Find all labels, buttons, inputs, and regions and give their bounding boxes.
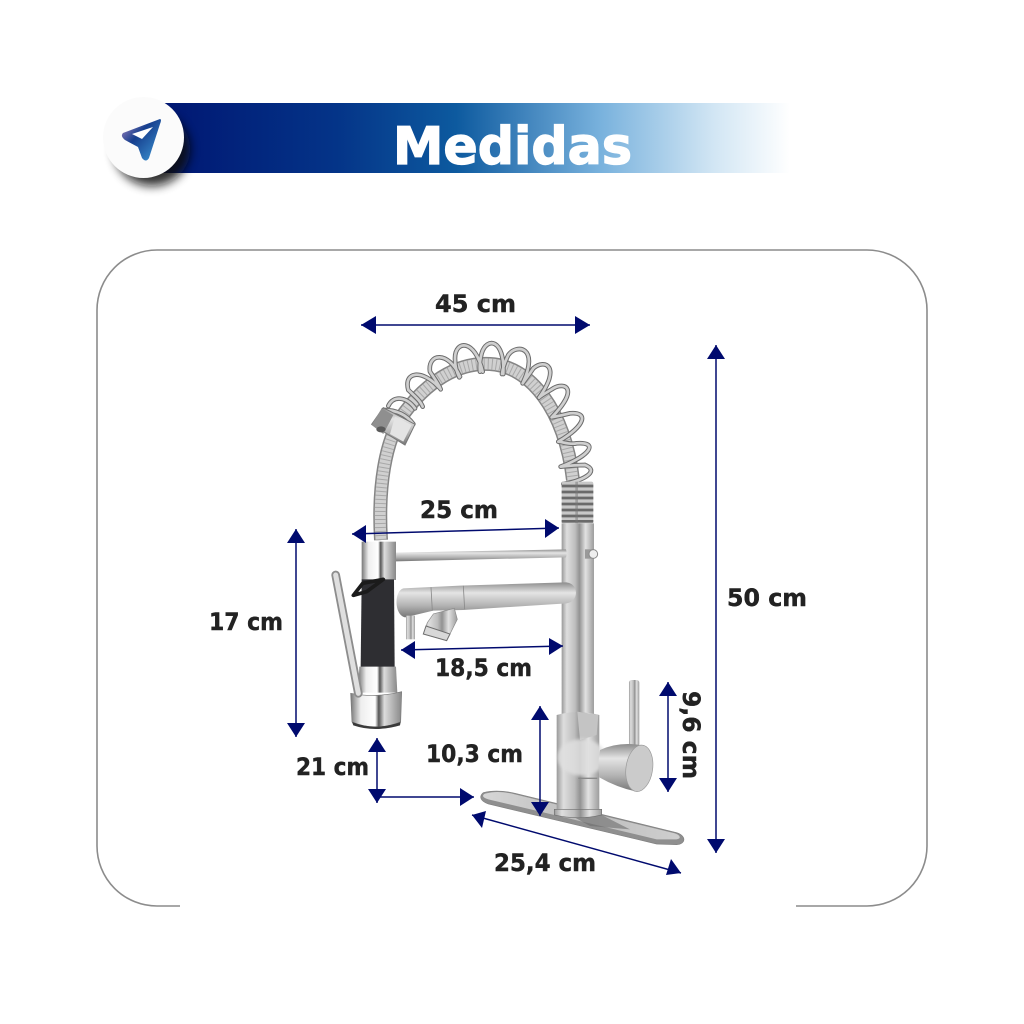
dimension: 25 cm: 25 cm bbox=[420, 496, 498, 524]
spray head: lower chrome bbox=[358, 667, 397, 693]
dimension: 25 cm bbox=[352, 496, 559, 543]
deck plate bbox=[481, 791, 684, 845]
dimension: 21 cm bbox=[296, 738, 474, 806]
logo badge bbox=[103, 97, 190, 186]
braided hose bbox=[380, 364, 573, 540]
handle lever bbox=[629, 680, 639, 747]
small pin bbox=[406, 616, 415, 639]
dimension: 45 cm bbox=[361, 290, 590, 334]
header banner bbox=[103, 97, 790, 186]
handle cylinder bbox=[598, 743, 656, 793]
dimension: 17 cm: 17 cm bbox=[209, 608, 283, 636]
dimension: 50 cm bbox=[707, 345, 807, 853]
base and plate bbox=[481, 680, 684, 845]
dimension: 25,4 cm bbox=[472, 811, 681, 877]
icon: brand arrow logo bbox=[122, 119, 161, 160]
aerator nozzle bbox=[423, 608, 457, 641]
upper holder bar bbox=[396, 549, 567, 561]
dimension: 50 cm: 50 cm bbox=[727, 584, 807, 612]
dimension: 45 cm: 45 cm bbox=[435, 290, 516, 318]
banner title: Medidas: Medidas bbox=[393, 117, 632, 177]
banner gradient bar bbox=[160, 103, 790, 173]
spray lever bbox=[336, 575, 358, 693]
lower faucet: column, spout and spray head bbox=[336, 523, 598, 729]
spring coils bbox=[372, 343, 591, 484]
compressed spring bbox=[562, 482, 593, 523]
spray head: black hose bbox=[361, 579, 395, 667]
spray head: bottom cup bbox=[351, 692, 402, 727]
dimension: 9,6 cm: 9,6 cm bbox=[677, 691, 705, 779]
dimension: 25,4 cm: 25,4 cm bbox=[494, 849, 596, 877]
column bbox=[562, 523, 594, 720]
faucet body bbox=[557, 712, 599, 810]
black clip loop bbox=[353, 579, 383, 595]
base ring bbox=[554, 809, 602, 818]
dimension: 21 cm: 21 cm bbox=[296, 753, 369, 781]
lower spout bbox=[397, 582, 576, 617]
dimension: 17 cm bbox=[209, 529, 305, 737]
panel outline bbox=[97, 250, 927, 906]
dimension: 18,5 cm bbox=[401, 638, 563, 682]
dimension: 10,3 cm bbox=[426, 706, 549, 816]
dimension: 18,5 cm: 18,5 cm bbox=[435, 654, 532, 682]
dimension: 9,6 cm bbox=[659, 682, 705, 792]
faucet illustration bbox=[336, 343, 684, 845]
spray head: upper sleeve bbox=[362, 542, 396, 580]
push button bbox=[585, 549, 598, 559]
dimension: 10,3 cm: 10,3 cm bbox=[426, 740, 523, 768]
hose collar nut bbox=[372, 408, 415, 445]
